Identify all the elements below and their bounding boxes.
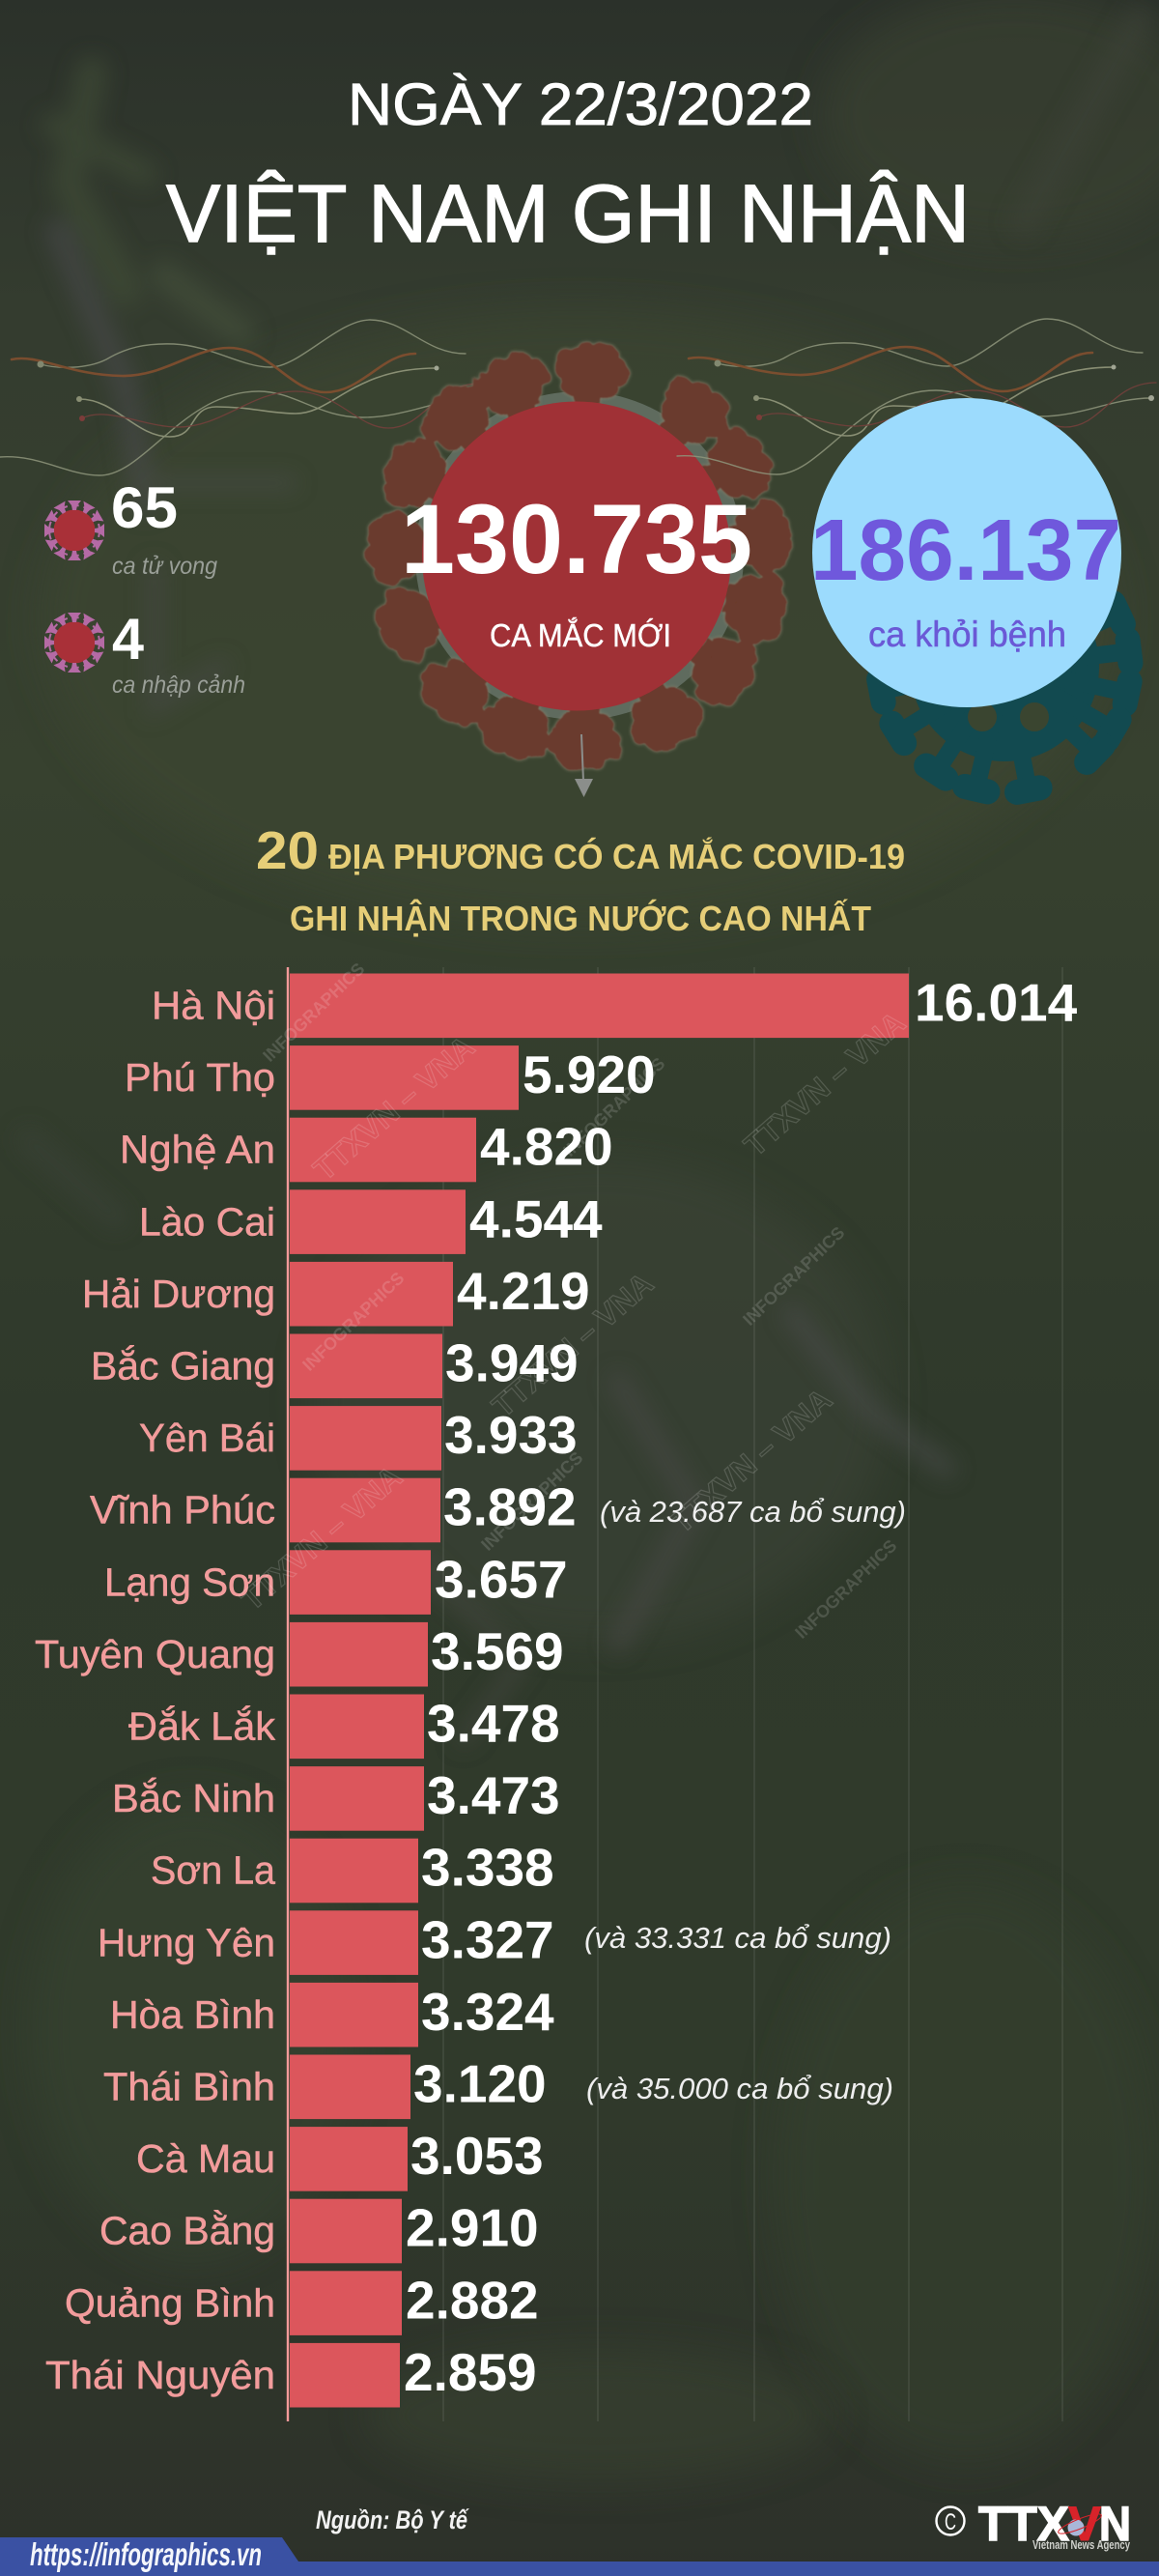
row: Đắk Lắk: Đắk Lắk bbox=[128, 1704, 275, 1749]
stat: recovered: ca khỏi bệnh bbox=[868, 615, 1066, 654]
row: Phú Thọ: 5.920 bbox=[523, 1045, 656, 1104]
watermarks: TTXVN – VNA bbox=[737, 1005, 912, 1163]
watermarks bbox=[234, 959, 912, 1643]
row: Thái Bình: 3.120 bbox=[413, 2054, 547, 2114]
row: Nghệ An: 4.820 bbox=[480, 1117, 613, 1177]
row: Bắc Giang: 3.949 bbox=[445, 1333, 579, 1393]
row: Cao Bằng: 2.910 bbox=[406, 2198, 539, 2258]
row: Phú Thọ bbox=[125, 1045, 656, 1110]
stat: imported: ca nhập cảnh bbox=[112, 672, 245, 699]
logo: TTXVN: TTX bbox=[978, 2497, 1069, 2551]
watermarks: TTXVN – VNA bbox=[306, 1029, 481, 1188]
row: Sơn La bbox=[151, 1838, 554, 1903]
row: Đắk Lắk: 3.478 bbox=[427, 1693, 560, 1753]
stat: new cases bbox=[401, 484, 752, 653]
chart heading: ĐỊA PHƯƠNG CÓ CA MẮC COVID-19 bbox=[328, 836, 905, 876]
bar chart bbox=[35, 967, 1078, 2421]
stat: new cases: 130.735 bbox=[401, 484, 752, 594]
row: Hải Dương bbox=[82, 1261, 590, 1326]
row: Lạng Sơn: 3.657 bbox=[435, 1549, 568, 1609]
row: Hòa Bình: 3.324 bbox=[421, 1982, 554, 2042]
title: main heading: VIỆT NAM GHI NHẬN bbox=[166, 168, 970, 259]
row: Hưng Yên: (và 33.331 ca bổ sung) bbox=[584, 1921, 891, 1955]
row: Hải Dương: Hải Dương bbox=[82, 1272, 275, 1316]
row: Lạng Sơn bbox=[104, 1549, 568, 1615]
stat: recovered: 186.137 bbox=[810, 502, 1121, 599]
stat: new cases: CA MẮC MỚI bbox=[490, 617, 671, 653]
row: Đắk Lắk bbox=[128, 1693, 560, 1759]
watermarks: INFOGRAPHICS bbox=[559, 1054, 668, 1160]
watermarks: INFOGRAPHICS bbox=[259, 959, 368, 1066]
watermarks: TTXVN – VNA bbox=[485, 1266, 660, 1424]
row: Hà Nội bbox=[152, 972, 1078, 1038]
row: Hưng Yên: Hưng Yên bbox=[98, 1920, 275, 1964]
logo: TTXVN: V bbox=[1068, 2497, 1102, 2551]
row: Thái Bình: Thái Bình bbox=[103, 2064, 275, 2108]
watermarks: TTXVN – VNA bbox=[234, 1459, 409, 1617]
brown coronavirus behind red circle bbox=[365, 340, 796, 770]
row: Thái Bình: (và 35.000 ca bổ sung) bbox=[586, 2072, 893, 2105]
footer url: https://infographics.vn bbox=[30, 2536, 262, 2572]
row: Quảng Bình: Quảng Bình bbox=[65, 2280, 275, 2325]
row: Cà Mau: Cà Mau bbox=[136, 2136, 275, 2181]
row: Tuyên Quang bbox=[35, 1621, 564, 1687]
chart heading: GHI NHẬN TRONG NƯỚC CAO NHẤT bbox=[290, 898, 871, 938]
stat: deaths bbox=[111, 475, 217, 580]
row: Tuyên Quang: Tuyên Quang bbox=[35, 1632, 275, 1676]
row: Hà Nội: 16.014 bbox=[915, 972, 1078, 1032]
footer band bbox=[0, 2537, 1159, 2576]
watermarks: INFOGRAPHICS bbox=[298, 1269, 408, 1375]
arrow bbox=[575, 734, 593, 797]
row: Cao Bằng bbox=[99, 2198, 539, 2263]
watermarks: INFOGRAPHICS bbox=[739, 1223, 848, 1330]
stat: imported bbox=[112, 607, 245, 699]
row: Cao Bằng: Cao Bằng bbox=[99, 2209, 275, 2253]
row: Sơn La: Sơn La bbox=[151, 1848, 275, 1893]
row: Hải Dương: 4.219 bbox=[457, 1261, 590, 1321]
row: Lào Cai: Lào Cai bbox=[139, 1199, 275, 1244]
watermarks: INFOGRAPHICS bbox=[791, 1536, 900, 1643]
logo: TTXVN bbox=[937, 2497, 1131, 2552]
row: Yên Bái: Yên Bái bbox=[139, 1416, 275, 1460]
row: Bắc Ninh: 3.473 bbox=[427, 1765, 560, 1825]
stat: deaths: ca tử vong bbox=[112, 553, 217, 580]
row: Bắc Ninh bbox=[112, 1765, 560, 1831]
chart heading: 20 bbox=[256, 820, 319, 880]
row: Hà Nội: Hà Nội bbox=[152, 984, 275, 1028]
row: Thái Nguyên: 2.859 bbox=[404, 2342, 537, 2402]
icon: small virus imported bbox=[44, 613, 104, 673]
row: Yên Bái bbox=[139, 1405, 578, 1471]
logo: TTXVN: C bbox=[945, 2509, 956, 2535]
row: Thái Nguyên: Thái Nguyên bbox=[45, 2353, 275, 2397]
icon: small virus deaths bbox=[44, 501, 104, 560]
row: Yên Bái: 3.933 bbox=[444, 1405, 578, 1465]
blue circle bbox=[812, 398, 1121, 707]
watermarks: TTXVN – VNA bbox=[664, 1382, 838, 1540]
row: Hưng Yên bbox=[98, 1909, 891, 1975]
watermarks: INFOGRAPHICS bbox=[477, 1448, 586, 1555]
row: Tuyên Quang: 3.569 bbox=[431, 1621, 564, 1681]
decorative wave lines: right set bbox=[677, 319, 1156, 474]
row: Lào Cai: 4.544 bbox=[469, 1188, 603, 1248]
row: Cà Mau: 3.053 bbox=[410, 2126, 544, 2186]
stat: deaths: 65 bbox=[111, 475, 178, 540]
title: date: NGÀY 22/3/2022 bbox=[348, 72, 813, 137]
decorative wave lines: left set bbox=[0, 320, 479, 475]
row: Vĩnh Phúc: (và 23.687 ca bổ sung) bbox=[600, 1495, 906, 1529]
row: Bắc Giang bbox=[91, 1333, 579, 1398]
logo: TTXVN: N bbox=[1099, 2497, 1131, 2551]
row: Hòa Bình bbox=[110, 1982, 554, 2046]
source note: Nguồn: Bộ Y tế bbox=[316, 2505, 469, 2534]
row: Cà Mau bbox=[136, 2126, 544, 2191]
row: Vĩnh Phúc: 3.892 bbox=[443, 1477, 577, 1537]
row: Lào Cai bbox=[139, 1188, 603, 1254]
row: Sơn La: 3.338 bbox=[421, 1838, 554, 1898]
row: Bắc Giang: Bắc Giang bbox=[91, 1343, 275, 1388]
row: Vĩnh Phúc bbox=[90, 1477, 906, 1542]
row: Quảng Bình bbox=[65, 2270, 539, 2335]
row: Quảng Bình: 2.882 bbox=[406, 2270, 539, 2330]
row: Thái Bình bbox=[103, 2054, 893, 2119]
stat: imported: 4 bbox=[112, 607, 145, 672]
row: Nghệ An bbox=[120, 1117, 613, 1182]
row: Bắc Ninh: Bắc Ninh bbox=[112, 1776, 275, 1820]
row: Hòa Bình: Hòa Bình bbox=[110, 1992, 275, 2037]
red circle bbox=[422, 402, 731, 711]
row: Nghệ An: Nghệ An bbox=[120, 1128, 275, 1172]
stat: recovered bbox=[810, 502, 1121, 654]
row: Thái Nguyên bbox=[45, 2342, 537, 2408]
chart heading bbox=[256, 820, 905, 938]
row: Vĩnh Phúc: Vĩnh Phúc bbox=[90, 1488, 275, 1532]
row: Hưng Yên: 3.327 bbox=[421, 1909, 554, 1969]
row: Lạng Sơn: Lạng Sơn bbox=[104, 1560, 275, 1604]
row: Phú Thọ: Phú Thọ bbox=[125, 1055, 275, 1100]
teal virus behind blue circle bbox=[879, 572, 1130, 792]
